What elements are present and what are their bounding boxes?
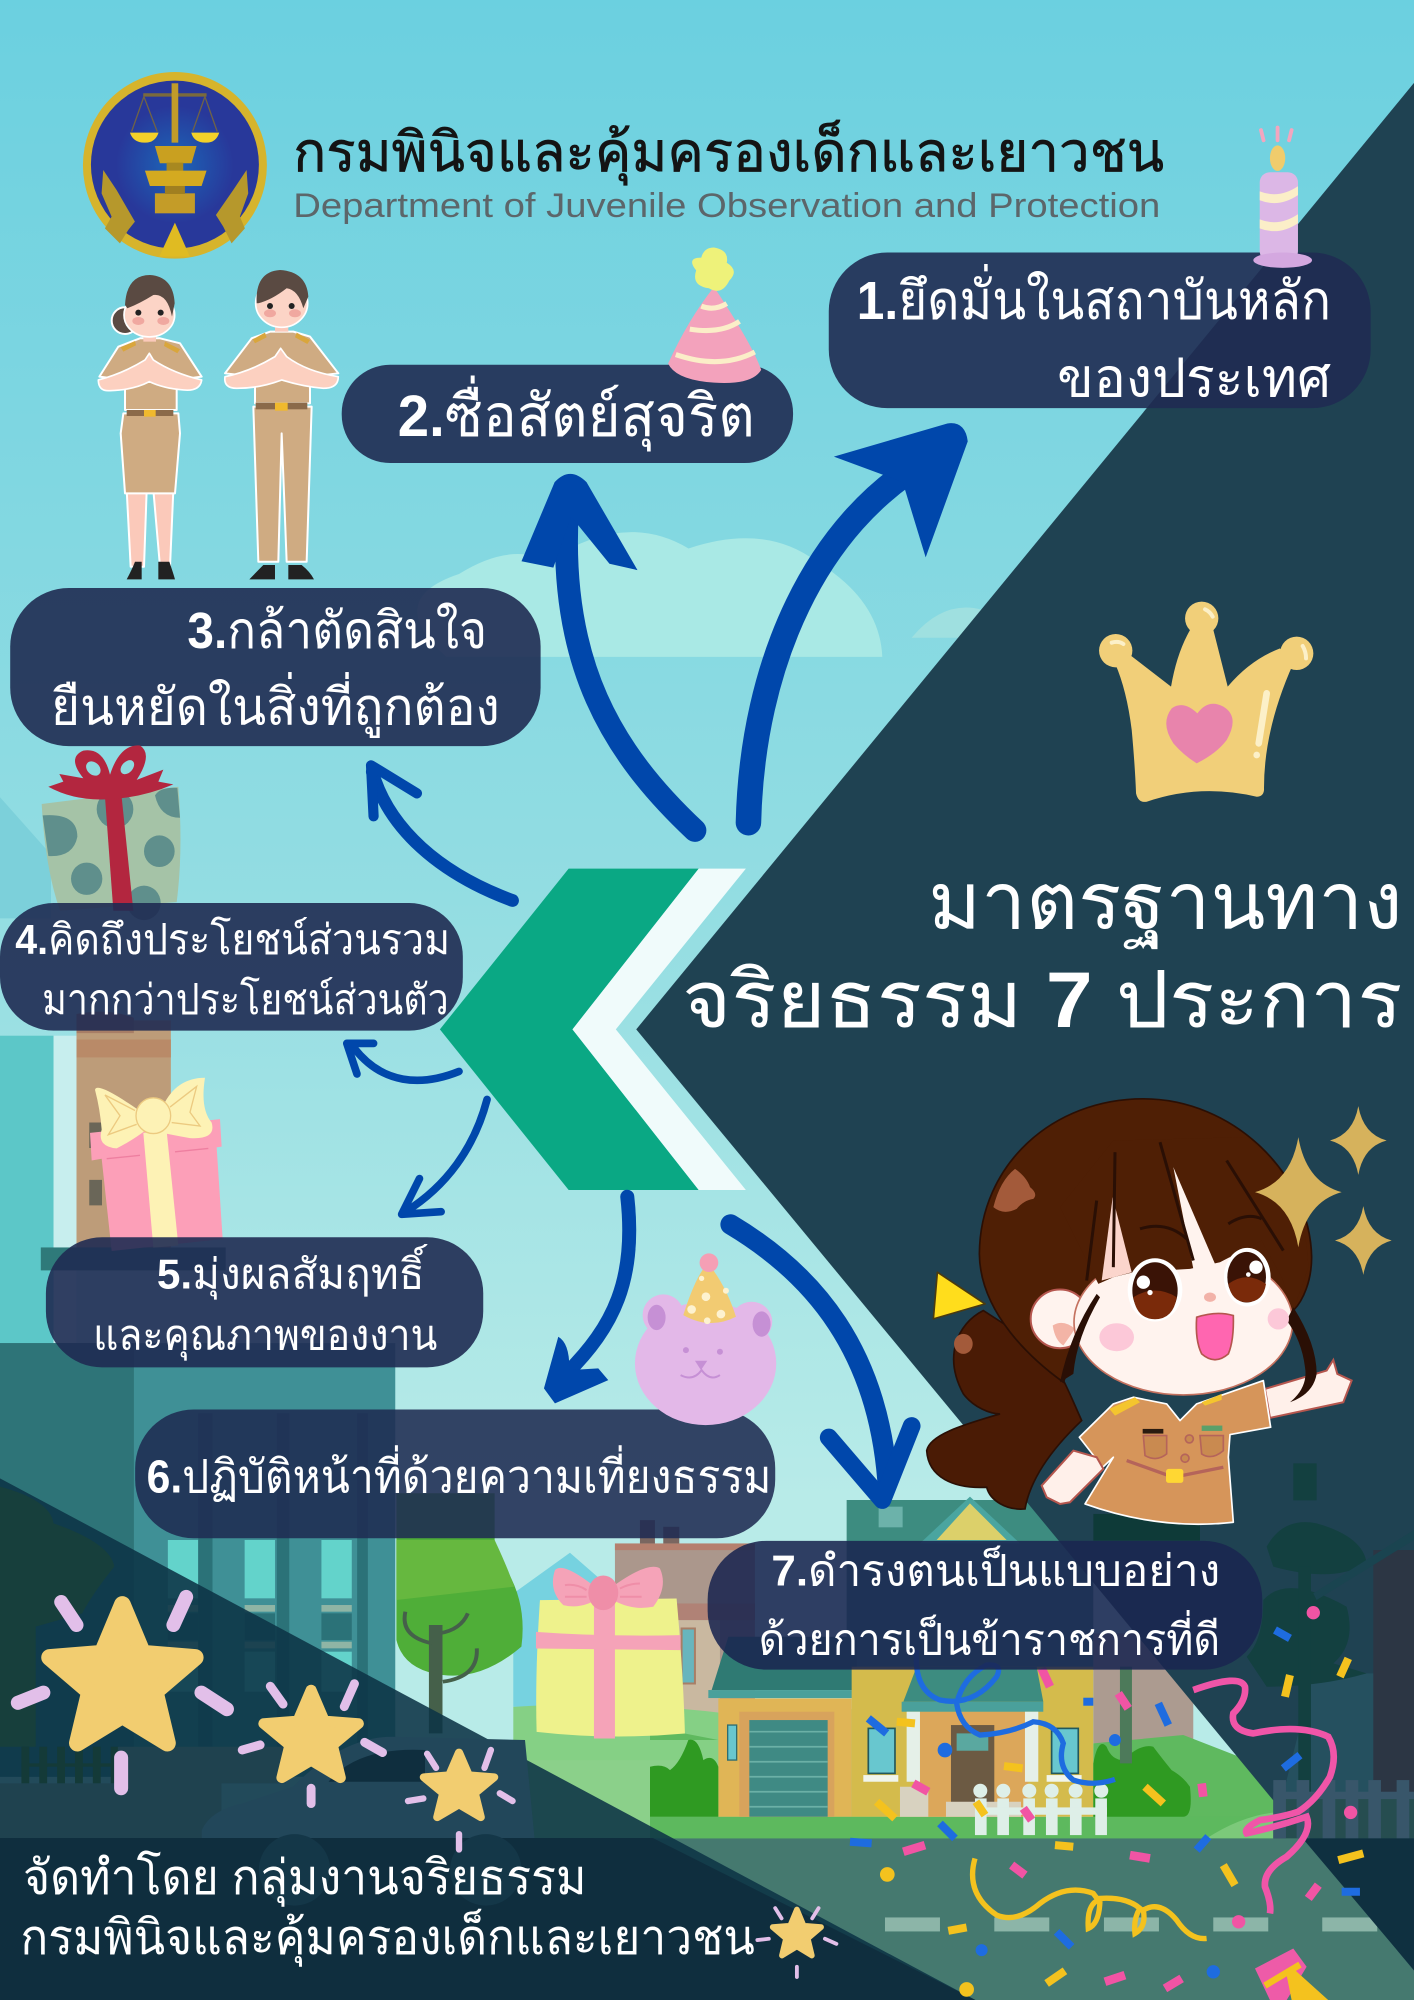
main title: จริยธรรม 7 ประการ <box>682 955 1403 1044</box>
face <box>1074 1250 1293 1395</box>
eyes <box>1128 1248 1271 1322</box>
female officer <box>98 275 202 579</box>
left hand <box>1042 1451 1103 1504</box>
tree <box>396 1493 523 1733</box>
chibi officer girl <box>927 1099 1392 1541</box>
background sky patch and brown house <box>513 1520 755 1760</box>
arrow to item 6 <box>544 1197 629 1403</box>
footer stars <box>18 1597 836 1977</box>
arm <box>1265 1360 1352 1418</box>
item 4 text: 4.คิดถึงประโยชน์ส่วนรวม <box>15 915 450 963</box>
arrow to item 4 <box>347 1043 459 1080</box>
icon: party popper <box>1255 1948 1328 2000</box>
pill 2 background <box>342 365 793 463</box>
background house, drawn in zoom coordinates <box>650 1497 1414 2000</box>
pill 7 background <box>708 1541 1262 1670</box>
background clouds <box>417 532 1017 657</box>
icon: candle <box>1253 128 1312 268</box>
bangs <box>1060 1137 1308 1311</box>
shirt <box>1079 1381 1271 1524</box>
icon: party hat <box>668 247 761 383</box>
arrow to item 2 <box>521 474 695 830</box>
item 2 text: 2.ซื่อสัตย์สุจริต <box>398 375 755 452</box>
item 3 text <box>51 602 500 738</box>
department logo <box>83 72 267 259</box>
blush <box>1099 1308 1289 1351</box>
confetti right part <box>1145 1606 1363 2000</box>
item 1 text: 1.ยึดมั่นในสถาบันหลัก <box>857 264 1331 331</box>
department name English: Department of Juvenile Observation and Protection <box>293 187 1160 225</box>
item 3 text: 3.กล้าตัดสินใจ <box>187 602 487 659</box>
icon: pink gift box <box>90 1078 223 1251</box>
arrow to item 5 <box>402 1099 487 1214</box>
dark right panel <box>636 83 1414 1971</box>
item 7 text: 7.ดำรงตนเป็นแบบอย่าง <box>771 1545 1220 1595</box>
arrow to item 7 <box>731 1224 912 1500</box>
dark bottom-left triangle <box>0 1478 975 2000</box>
item 1 text: ของประเทศ <box>1057 350 1331 409</box>
officers: two staff figures <box>98 270 338 579</box>
pill 6 background <box>135 1409 775 1538</box>
pill 5 background <box>46 1237 483 1367</box>
pill 1 background <box>829 253 1371 408</box>
left hair strand <box>1060 1294 1100 1382</box>
item 4 text: มากกว่าประโยชน์ส่วนตัว <box>42 975 449 1023</box>
building windows and columns <box>168 1413 368 1747</box>
ponytail <box>927 1311 1082 1509</box>
pill 4 background <box>0 903 463 1031</box>
item 7 text: ด้วยการเป็นข้าราชการที่ดี <box>759 1609 1220 1664</box>
pill 3 background <box>10 588 541 746</box>
item 4 text <box>15 915 450 1023</box>
item 7 text <box>759 1545 1220 1664</box>
gold sparkles <box>1255 1106 1392 1275</box>
department name Thai: กรมพินิจและคุ้มครองเด็กและเยาวชน <box>293 120 1164 186</box>
item 3 text: ยืนหยัดในสิ่งที่ถูกต้อง <box>51 672 500 738</box>
mouth <box>1196 1313 1233 1360</box>
item 1 text <box>857 264 1331 409</box>
item 5 text: และคุณภาพของงาน <box>93 1311 437 1361</box>
main title: มาตรฐานทาง <box>928 857 1403 949</box>
background scene: city buildings <box>0 797 893 1838</box>
confetti left part <box>850 1650 1207 1997</box>
item 5 text: 5.มุ่งผลสัมฤทธิ์ <box>157 1243 428 1300</box>
dark bottom-left scene: trees, fence, car <box>0 1487 536 1853</box>
footer credit <box>20 1850 755 1967</box>
hair <box>979 1099 1312 1382</box>
yellow hair ribbon <box>933 1272 985 1319</box>
icon: yellow gift box <box>536 1567 685 1739</box>
footer credit: จัดทำโดย กลุ่มงานจริยธรรม <box>23 1850 587 1907</box>
item 6 text: 6.ปฏิบัติหน้าที่ด้วยความเที่ยงธรรม <box>147 1444 771 1502</box>
arrow to item 3 <box>371 765 513 901</box>
icon: green gift box <box>42 745 180 920</box>
right hair strand <box>1287 1307 1317 1402</box>
male officer <box>225 270 338 579</box>
dark scene on the right panel <box>1247 1463 1414 1970</box>
arrow to item 1 <box>748 423 968 823</box>
footer credit: กรมพินิจและคุ้มครองเด็กและเยาวชน <box>20 1908 755 1967</box>
car wheels <box>259 1834 521 1906</box>
ear <box>1031 1290 1089 1348</box>
icon: teddy bear with party hat <box>635 1253 776 1425</box>
green and white chevron <box>440 869 746 1190</box>
main title <box>682 857 1403 1044</box>
dark bottom band <box>0 1838 975 2000</box>
item 5 text <box>93 1243 437 1361</box>
icon: crown <box>1099 602 1313 802</box>
nose <box>1204 1293 1216 1302</box>
